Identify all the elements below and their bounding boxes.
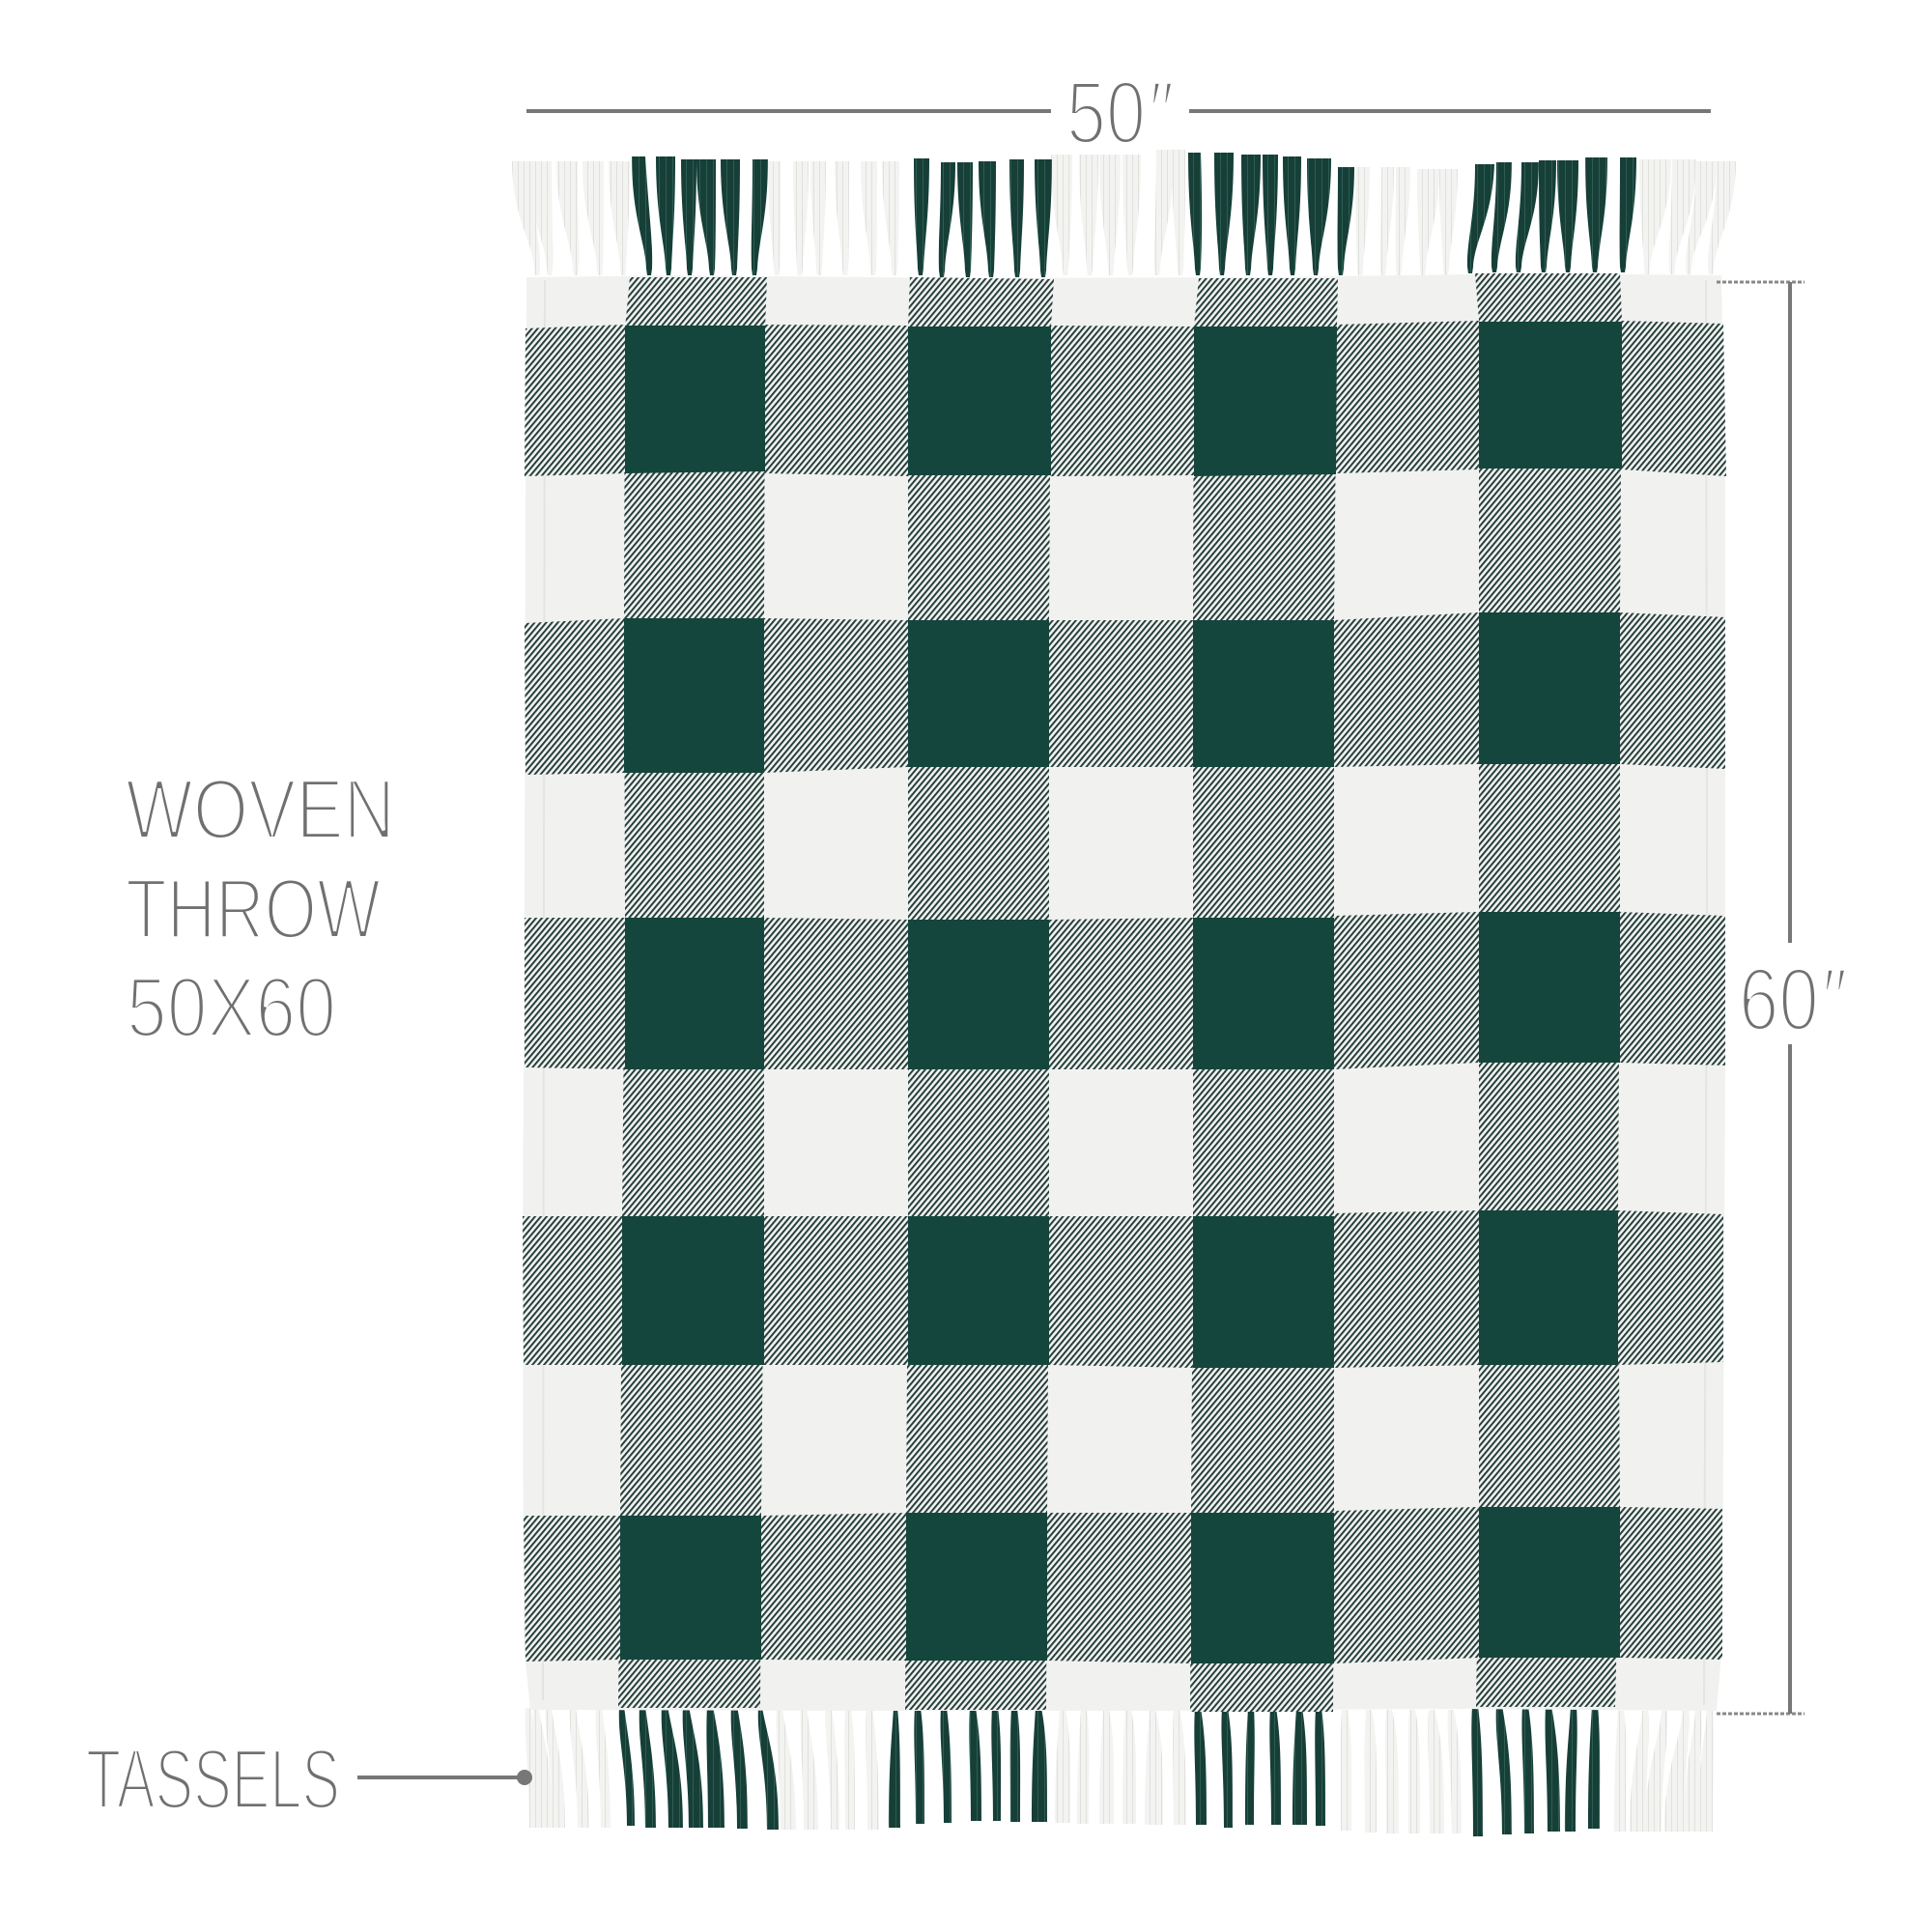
width dimension: 50 inches: 50″ bbox=[1066, 64, 1174, 162]
height dimension: 60 inches: 60″ bbox=[1739, 951, 1847, 1049]
width dimension: 50 inches bbox=[526, 64, 1711, 162]
tassels callout: TASSELS bbox=[86, 1731, 340, 1827]
height dimension: 60 inches bbox=[1717, 282, 1847, 1714]
white fabric base bbox=[523, 273, 1725, 1711]
product title: WOVEN bbox=[126, 761, 395, 857]
hem folds bbox=[543, 280, 1707, 1705]
product title: THROW bbox=[126, 861, 381, 956]
bottom fringe tassels bbox=[526, 1706, 1714, 1836]
twill vertical bands bbox=[618, 273, 1622, 1712]
solid green squares bbox=[620, 322, 1622, 1663]
product title: 50X60 bbox=[127, 959, 336, 1055]
throw blanket bbox=[523, 273, 1726, 1712]
twill horizontal bands bbox=[523, 321, 1726, 1663]
product title bbox=[126, 761, 395, 1055]
top fringe tassels bbox=[512, 150, 1736, 277]
